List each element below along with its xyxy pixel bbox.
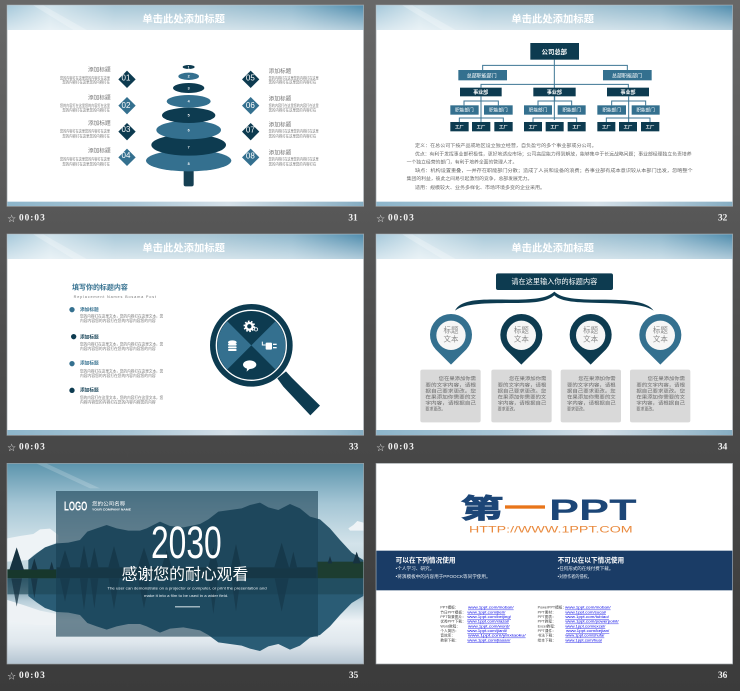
bullet list: 内容内容您的内容打在您的内容内容您的内容 — [80, 345, 156, 351]
resource link list right: PPT课件： — [538, 628, 556, 633]
right text blocks: 您的内容打在这里您的内容打在这里 — [269, 156, 319, 162]
explanatory paragraph: 一个独立经营的部门，有利于培养全面的管理人才。 — [407, 158, 517, 165]
resource link list left: www.1ppt.com/xiazai/ — [467, 619, 510, 624]
resource link list left: 音效库： — [440, 633, 455, 638]
left text blocks: 添加标题 — [88, 119, 111, 127]
text card 2: 要的文字内容，请根 — [498, 381, 547, 388]
text card 1: 您在果添加你需 — [439, 375, 476, 382]
title: 单击此处添加标题 — [142, 242, 226, 255]
heading box: 请在这里输入你的标题内容 — [511, 277, 597, 286]
pin markers: 文本 — [583, 334, 599, 344]
thank-you heading: 感谢您的耐心观看 — [122, 565, 248, 583]
resource link list right: PPT图表： — [538, 614, 556, 619]
bullet list: 您的内容打在这里文本，您的内容打在这里文本，您 — [80, 340, 163, 346]
explanatory paragraph: 适用：规模较大、业务多样化、市场环境多变的企业采用。 — [415, 184, 545, 191]
org chart boxes: 工厂 — [572, 124, 582, 130]
usage band: •任何形式的在线付费下载。 — [558, 565, 613, 572]
right text blocks: 您的内容打在这里您的内容打在这里 — [269, 128, 319, 134]
caption: star and timing — [7, 213, 46, 225]
tree chart: 6 — [188, 128, 190, 132]
caption: star and timing — [7, 671, 46, 683]
org chart boxes: 工厂 — [550, 124, 560, 130]
left text blocks: 您的内容打在这里您的内容打在这里 — [60, 74, 110, 80]
explanatory paragraph: 定义：在总公司下按产品或地区设立独立经营，自负盈亏的多个事业部或分公司。 — [415, 142, 597, 149]
org chart connectors — [459, 60, 650, 122]
pin markers: 标题 — [583, 325, 599, 335]
caption: star and timing: ☆ — [7, 671, 16, 683]
org chart boxes: 职能部门 — [489, 107, 508, 114]
page number: 33 — [349, 442, 359, 452]
left text blocks: 添加标题 — [88, 147, 111, 155]
caption: star and timing: ☆ — [7, 213, 16, 225]
resource link list right: www.1ppt.com/powerpoint/ — [565, 619, 620, 624]
usage band: 可以在下列情况使用 — [396, 556, 456, 565]
icon: speech bubble — [243, 360, 256, 372]
panel: slide 34 location pins — [376, 234, 733, 454]
page number: 34 — [718, 442, 728, 452]
pin markers: 文本 — [444, 334, 459, 344]
panel: slide 32 organisation chart — [376, 5, 733, 225]
resource link list left: www.1ppt.com/word/ — [468, 623, 511, 628]
caption: star and timing — [7, 442, 46, 454]
right diamonds: 07 — [246, 126, 255, 135]
caption: star and timing: ☆ — [376, 213, 385, 225]
text card 2: 据自己要求更改。您 — [498, 387, 547, 394]
text card 4: 您在果添加你需 — [648, 375, 685, 382]
text card 1: 据自己要求更改。您 — [425, 387, 476, 394]
org chart boxes: 总部职能部门 — [612, 72, 642, 79]
page number: 35 — [349, 671, 359, 681]
resource link list right: 书法下载： — [538, 633, 556, 638]
caption: star and timing — [376, 442, 415, 454]
org chart boxes: 工厂 — [602, 124, 611, 130]
text card 3: 要的文字内容，请根 — [567, 381, 616, 388]
right text blocks: 添加标题 — [269, 67, 292, 75]
bullet list: 内容内容您的内容打在您的内容内容您的内容 — [80, 372, 156, 378]
resource link list right: www.1ppt.com/sucai/ — [565, 609, 607, 614]
resource link list left: www.1ppt.com/yinxiaoku/ — [468, 633, 527, 638]
bullet list: 添加标题 — [80, 359, 99, 366]
left diamonds: 03 — [122, 125, 131, 134]
text card 4: 据自己要求更改。您 — [636, 387, 685, 394]
footer band — [376, 430, 732, 435]
text card 1: 要求更改。 — [425, 406, 445, 413]
caption: star and timing — [376, 213, 415, 225]
org chart boxes: 职能部门 — [455, 107, 474, 114]
left text blocks: 您的内容打在这里您的内容打在这里 — [60, 156, 110, 162]
bullet list: 添加标题 — [80, 386, 99, 393]
org chart boxes: 工厂 — [499, 124, 508, 130]
org chart boxes — [450, 43, 660, 131]
org chart boxes: 总部职能部门 — [467, 72, 497, 79]
text card 3: 在果添加你需要的文 — [567, 393, 616, 400]
left text blocks: 您的内容打在这里您的内容打在 — [62, 160, 110, 166]
left text blocks: 添加标题 — [88, 93, 111, 101]
resource link list left: 个人简历： — [440, 628, 459, 633]
org chart boxes: 工厂 — [455, 124, 464, 130]
caption: star and timing: 00:03 — [388, 214, 415, 224]
caption: star and timing: 00:03 — [19, 214, 46, 224]
header band — [7, 234, 363, 259]
org chart boxes: 公司总部 — [542, 47, 568, 56]
right text blocks: 您的内容打在这里您的内容打在 — [269, 132, 316, 138]
right diamonds: 08 — [246, 152, 255, 161]
text card 2: 字内容，请根据自己 — [498, 399, 547, 406]
text card 4: 要求更改。 — [636, 406, 656, 413]
resource link list left: www.1ppt.com/jiaoan/ — [467, 637, 511, 642]
org chart boxes: 职能部门 — [636, 107, 655, 114]
right text blocks: 您的内容打在这里您的内容打在 — [269, 160, 316, 166]
org chart boxes: 事业部 — [547, 89, 562, 96]
text card 4: 在果添加你需要的文 — [636, 393, 685, 400]
org chart boxes: 工厂 — [646, 124, 655, 130]
logo: 您的公司名称 — [92, 499, 126, 507]
usage band: 不可以在以下情况使用 — [558, 556, 624, 565]
bullet list: 添加标题 — [80, 306, 99, 313]
right text blocks: 您的内容打在这里您的内容打在这里 — [269, 102, 319, 108]
text card 3: 字内容，请根据自己 — [567, 399, 616, 406]
pin markers: 标题 — [444, 325, 459, 335]
resource link list left: 节日PPT模板： — [440, 609, 466, 614]
logo: LOGO — [64, 498, 87, 513]
icon: database — [228, 340, 237, 351]
panel: slide 31 tree diagram — [7, 5, 364, 225]
explanatory paragraph: 集团的利益，彼此之间易引起激烈的竞争，总部发展无力。 — [407, 175, 532, 182]
left text blocks: 您的内容打在这里您的内容打在 — [62, 132, 110, 138]
bullet list: 内容内容您的内容打在您的内容内容您的内容 — [80, 317, 156, 323]
text card 1: 字内容，请根据自己 — [425, 399, 476, 406]
text card 3: 据自己要求更改。您 — [567, 387, 616, 394]
small description: The user can demonstrate on a projector or computer, or print the presentation and — [107, 587, 267, 591]
resource link list right — [538, 605, 620, 642]
text card 4: 要的文字内容，请根 — [636, 381, 685, 388]
resource link list right: www.1ppt.com/excel/ — [565, 623, 606, 628]
content heading — [72, 282, 157, 299]
explanatory paragraph — [407, 142, 693, 191]
brace connector — [455, 292, 654, 311]
resource link list left: 优秀PPT下载： — [440, 619, 466, 624]
header band — [376, 234, 732, 259]
resource link list right: PowerPPT模板： — [538, 605, 566, 610]
tree chart: 4 — [188, 100, 191, 104]
text card 2: 在果添加你需要的文 — [498, 393, 547, 400]
usage band: •个人学习、研究。 — [396, 565, 434, 572]
content heading: Replacement Names Bosama Post — [74, 295, 157, 299]
resource link list right: PPT教程： — [538, 619, 556, 624]
brand logo: HTTP://WWW.1PPT.COM — [469, 525, 633, 535]
right diamonds: 05 — [246, 74, 255, 83]
tree chart: 7 — [188, 146, 190, 150]
resource link list left: PPT背景图片： — [440, 614, 466, 619]
landscape photo — [7, 464, 363, 664]
resource link list left: www.1ppt.com/jianli/ — [467, 628, 508, 633]
bullet list: 添加标题 — [80, 333, 99, 340]
left diamonds: 02 — [122, 101, 131, 110]
icon: plug — [262, 342, 277, 350]
bullet list: 您的内容打在这里文本，您的内容打在这里文本，您 — [80, 394, 163, 400]
usage band — [376, 551, 732, 590]
title: 单击此处添加标题 — [511, 13, 595, 26]
org chart boxes: 工厂 — [624, 124, 633, 130]
resource link list left: PPT模板： — [440, 605, 458, 610]
text card 1: 要的文字内容，请根 — [425, 381, 476, 388]
pin markers: 文本 — [653, 334, 668, 344]
resource link list left: 教案下载： — [440, 637, 459, 642]
tree chart: 1 — [188, 65, 190, 69]
bullet list: 内容内容您的内容打在您的内容内容您的内容 — [80, 398, 156, 404]
left diamonds — [118, 71, 136, 166]
title: 单击此处添加标题 — [142, 13, 226, 26]
text card 3 — [561, 370, 621, 422]
resource link list right: 绘本下载： — [538, 637, 556, 642]
right text blocks: 您的内容打在这里您的内容打在 — [269, 107, 316, 113]
text card 2: 要求更改。 — [498, 406, 518, 413]
org chart boxes: 工厂 — [529, 124, 538, 130]
heading box — [496, 273, 613, 290]
brand logo: 第 — [461, 494, 503, 524]
page number: 36 — [718, 671, 728, 681]
content heading: 填写你的标题内容 — [72, 282, 128, 291]
caption: star and timing: 00:03 — [19, 671, 46, 681]
text card 2: 您在果添加你需 — [509, 375, 547, 382]
right text blocks: 您的内容打在这里您的内容打在这里 — [269, 74, 319, 80]
page number: 31 — [348, 214, 358, 224]
resource link list right: www.1ppt.com/shufa/ — [565, 633, 605, 638]
org chart boxes: 事业部 — [621, 89, 635, 96]
icon: gears — [244, 321, 258, 331]
text card 3: 您在果添加你需 — [578, 375, 616, 382]
caption: star and timing: ☆ — [376, 442, 385, 454]
caption: star and timing: 00:03 — [388, 442, 415, 452]
left text blocks: 您的内容打在这里您的内容打在这里 — [60, 102, 110, 108]
tree chart: 8 — [188, 162, 190, 166]
bullet list: 您的内容打在这里文本，您的内容打在这里文本，您 — [80, 367, 163, 373]
text card 1: 在果添加你需要的文 — [425, 393, 476, 400]
small description — [107, 587, 267, 598]
magnifier graphic — [210, 304, 320, 415]
footer band — [7, 430, 363, 435]
org chart boxes: 工厂 — [477, 124, 486, 130]
right text blocks — [269, 67, 319, 166]
left diamonds: 04 — [122, 151, 131, 160]
resource link list left: www.1ppt.com/moban/ — [468, 605, 515, 610]
tree chart — [146, 65, 231, 186]
left diamonds: 01 — [122, 74, 131, 83]
org chart boxes: 事业部 — [473, 89, 488, 96]
left text blocks: 您的内容打在这里您的内容打在 — [62, 107, 110, 113]
explanatory paragraph: 缺点：机构设置重叠，一并存在职能部门分散；造成了人员和设备的浪费；各事业部有成本意识较从本部门出发，忽略整个 — [415, 167, 693, 174]
pin markers: 标题 — [514, 325, 529, 335]
small description: make it into a film to be used in a wider field. — [144, 594, 228, 598]
bullet list — [69, 306, 163, 404]
brand logo: PPT — [549, 494, 637, 527]
right text blocks: 添加标题 — [269, 121, 292, 129]
org chart boxes: 职能部门 — [562, 107, 581, 114]
short rule — [175, 606, 200, 607]
resource link list left: www.1ppt.com/jieri/ — [467, 609, 506, 614]
right text blocks: 您的内容打在这里您的内容打在 — [269, 79, 316, 85]
resource link list right: www.1ppt.com/moban/ — [565, 605, 612, 610]
footer band — [376, 202, 732, 206]
right diamonds — [242, 71, 259, 166]
left text blocks: 添加标题 — [88, 66, 111, 74]
org chart boxes: 职能部门 — [529, 107, 548, 114]
resource link list left: www.1ppt.com/beijing/ — [467, 614, 512, 619]
right text blocks: 添加标题 — [269, 95, 292, 103]
resource link list right: PPT素材： — [538, 609, 556, 614]
header band — [7, 5, 363, 30]
footer band — [7, 202, 363, 206]
usage band: •将演模板中的内容用于PPOOCK等同学使用。 — [396, 573, 491, 580]
caption: star and timing: 00:03 — [19, 442, 46, 452]
brand logo — [461, 494, 637, 535]
usage band: •对原作者的侵权。 — [558, 573, 592, 580]
left text blocks: 您的内容打在这里您的内容打在 — [62, 79, 110, 85]
right diamonds: 06 — [246, 101, 255, 110]
resource link list left — [440, 605, 527, 642]
explanatory paragraph: 优点：有利于发挥事业部积极性，更好地适应市场；公司高层能力得到解放，能够集中于长远战略问题；事业部经理独立负责培养 — [415, 151, 692, 158]
tree chart: 2 — [188, 75, 190, 79]
page number: 32 — [718, 214, 728, 224]
panel: slide 36 first PPT notice — [376, 463, 733, 681]
text card 4: 字内容，请根据自己 — [636, 399, 685, 406]
resource link list right: www.1ppt.com/hua/ — [565, 637, 603, 642]
left text blocks — [60, 66, 111, 166]
tree chart: 3 — [188, 87, 190, 91]
pin markers: 文本 — [514, 334, 529, 344]
title: 单击此处添加标题 — [511, 242, 595, 255]
right text blocks: 添加标题 — [269, 148, 292, 156]
org chart boxes: 职能部门 — [602, 107, 621, 114]
big year: 2030 — [151, 517, 222, 568]
bullet list: 您的内容打在这里文本，您的内容打在这里文本，您 — [80, 312, 163, 318]
pin markers — [430, 314, 681, 365]
translucent overlay panel — [56, 491, 318, 637]
resource link list right: www.1ppt.com/kejian/ — [566, 628, 610, 633]
resource link list right: www.1ppt.com/tubiao/ — [565, 614, 610, 619]
resource link list left: Word教程： — [440, 623, 460, 628]
caption: star and timing: ☆ — [7, 442, 16, 454]
tree chart: 5 — [188, 114, 190, 118]
left text blocks: 您的内容打在这里您的内容打在这里 — [60, 128, 110, 134]
logo: YOUR COMPANY NAME — [92, 508, 131, 512]
panel: slide 35 landscape closing slide — [7, 463, 364, 683]
panel: slide 33 magnifier — [7, 234, 364, 454]
pin markers: 标题 — [653, 325, 668, 335]
text card 4 — [630, 370, 690, 422]
text card 1 — [420, 370, 481, 422]
text card 2 — [491, 370, 552, 422]
logo — [64, 498, 131, 513]
header band — [376, 5, 732, 30]
text card 3: 要求更改。 — [567, 406, 587, 413]
resource link list right: Excel教程： — [538, 623, 558, 628]
